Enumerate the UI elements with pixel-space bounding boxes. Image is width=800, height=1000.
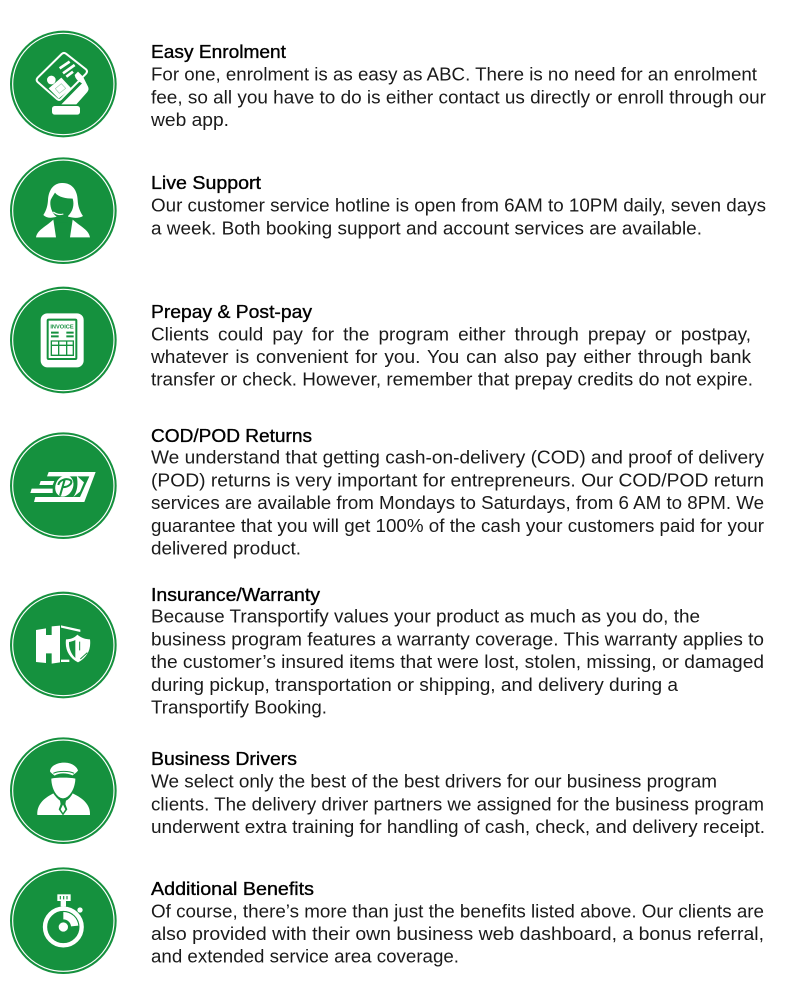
icon: invoice: INVOICE	[50, 325, 74, 331]
text block: Business Drivers: Business Drivers	[151, 749, 297, 769]
text block: Prepay & Post-pay: Prepay & Post-pay	[151, 302, 312, 322]
text block: Live Support: a week. Both booking support and account services are available.	[151, 218, 702, 238]
text block: Insurance/Warranty: Transportify Booking.	[151, 698, 327, 718]
text block: Additional Benefits: Of course, there’s more than just the benefits listed above. Our clients are	[151, 902, 764, 922]
text block: Additional Benefits: Additional Benefits	[151, 879, 314, 899]
text block: Easy Enrolment: Easy Enrolment	[151, 42, 286, 62]
text block: Insurance/Warranty: business program features a warranty coverage. This warranty applies to	[151, 629, 764, 649]
icon: business driver	[10, 737, 117, 844]
text block: Additional Benefits	[151, 879, 764, 967]
text block: COD/POD Returns: services are available from Mondays to Saturdays, from 6 AM to 8PM. We	[151, 493, 764, 513]
icon: enrolment card in hand	[10, 31, 117, 137]
text block: Easy Enrolment: web app.	[150, 110, 229, 130]
icon: insurance shield	[10, 592, 117, 698]
text block: Easy Enrolment: fee, so all you have to do is either contact us directly or enroll through our	[151, 87, 766, 107]
text block: Business Drivers: underwent extra training for handling of cash, check, and delivery receipt.	[151, 817, 765, 837]
text block: Prepay & Post-pay: whatever is convenient for you. You can also pay either through bank	[150, 347, 752, 367]
text block: Insurance/Warranty: the customer’s insured items that were lost, stolen, missing, or damaged	[151, 652, 764, 672]
text block: Easy Enrolment	[150, 42, 766, 130]
text block: Additional Benefits: also provided with their own business web dashboard, a bonus referral,	[151, 924, 764, 944]
icon: cash returns	[10, 432, 117, 539]
text block: COD/POD Returns: delivered product.	[151, 538, 301, 558]
text block: Insurance/Warranty	[151, 585, 764, 718]
icon: stopwatch	[10, 867, 117, 974]
text block: Live Support: Live Support	[151, 173, 261, 193]
text block: COD/POD Returns: guarantee that you will get 100% of the cash your customers paid for your	[151, 516, 764, 536]
text block: Business Drivers: We select only the best of the best drivers for our business program	[151, 772, 717, 792]
text block: COD/POD Returns	[151, 426, 764, 558]
text block: Prepay & Post-pay: transfer or check. However, remember that prepay credits do not expire.	[151, 370, 753, 390]
text block: Insurance/Warranty: during pickup, transportation or shipping, and delivery during a	[151, 675, 679, 695]
icon: invoice	[10, 287, 117, 393]
text block: Easy Enrolment: For one, enrolment is as easy as ABC. There is no need for an enrolment	[151, 64, 757, 84]
text block: COD/POD Returns: (POD) returns is very important for entrepreneurs. Our COD/POD return	[151, 470, 764, 490]
text block: Business Drivers	[151, 749, 765, 837]
text block: Business Drivers: clients. The delivery driver partners we assigned for the business program	[151, 794, 764, 814]
text block: Additional Benefits: and extended service area coverage.	[151, 947, 459, 967]
text block: Live Support: Our customer service hotline is open from 6AM to 10PM daily, seven days	[151, 196, 766, 216]
icon: live support agent	[10, 157, 117, 264]
text block: Prepay & Post-pay: Clients could pay for the program either through prepay or postpay,	[151, 325, 751, 345]
text block: Live Support	[151, 173, 766, 238]
text block: Prepay & Post-pay	[150, 302, 753, 390]
text block: COD/POD Returns: We understand that getting cash-on-delivery (COD) and proof of delivery	[151, 448, 764, 468]
text block: COD/POD Returns: COD/POD Returns	[151, 426, 312, 446]
text block: Insurance/Warranty: Because Transportify values your product as much as you do, the	[151, 607, 700, 627]
text block: Insurance/Warranty: Insurance/Warranty	[151, 585, 320, 605]
